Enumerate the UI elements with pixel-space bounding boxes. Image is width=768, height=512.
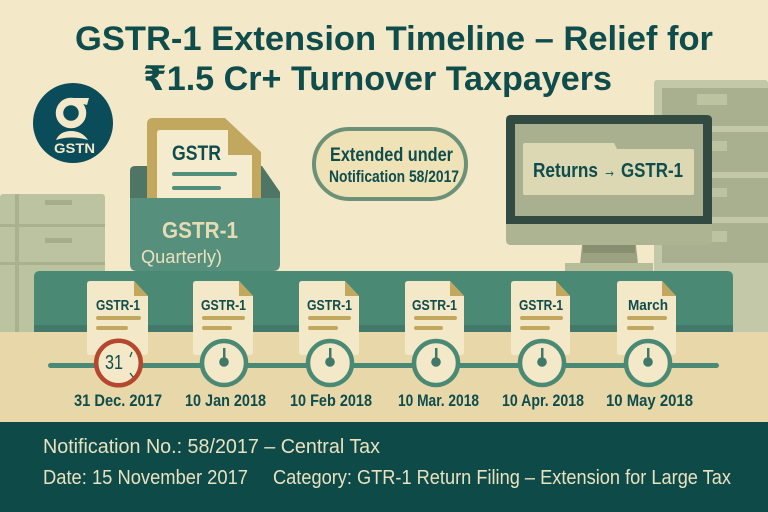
milestone: 10 Apr. 2018: GSTR-1 — [519, 297, 563, 314]
category: Category: GTR-1 Return Filing – Extension for Large Tax — [273, 467, 731, 489]
icon: GSTN logo — [33, 83, 113, 163]
milestone: 10 Jan 2018 — [185, 281, 266, 410]
title: GSTR-1 Extension Timeline – Relief for — [75, 20, 713, 58]
icon: GSTR folder with document: GSTR — [172, 142, 221, 165]
milestone: 10 Mar. 2018 — [398, 281, 479, 410]
milestone: 10 Apr. 2018: 10 Apr. 2018 — [502, 391, 584, 410]
timeline line — [48, 363, 719, 368]
milestone: 10 May 2018: March — [628, 297, 668, 314]
screen folder: Returns to GSTR-1 — [523, 143, 694, 195]
icon: GSTR folder with document: Quarterly) — [141, 247, 222, 267]
milestone: 10 Feb 2018 — [290, 281, 372, 410]
milestone: 10 Mar. 2018: GSTR-1 — [412, 297, 457, 314]
title: ₹1.5 Cr+ Turnover Taxpayers — [143, 60, 612, 98]
footer panel — [0, 422, 768, 512]
icon: GSTR folder with document — [130, 118, 280, 271]
icon: GSTR folder with document: GSTR-1 — [162, 217, 238, 243]
milestone: 31 Dec. 2017 — [74, 281, 162, 410]
icon: left filing cabinet — [0, 194, 105, 334]
title — [75, 20, 713, 98]
milestone: 10 Jan 2018: GSTR-1 — [201, 297, 246, 314]
icon: GSTN logo: GSTN — [54, 140, 95, 156]
callout: extended under notification — [314, 129, 466, 199]
milestone: 31 Dec. 2017: 31 — [105, 352, 123, 374]
milestone: 10 May 2018 — [606, 281, 693, 410]
milestone: 10 May 2018: 10 May 2018 — [606, 391, 693, 410]
milestone: 10 Feb 2018: GSTR-1 — [307, 297, 352, 314]
milestone: 10 Feb 2018: 10 Feb 2018 — [290, 391, 372, 410]
timeline band — [34, 271, 733, 332]
screen folder: Returns to GSTR-1: Returns — [533, 160, 598, 182]
icon: computer monitor — [506, 115, 712, 272]
milestone: 31 Dec. 2017: 31 Dec. 2017 — [74, 391, 162, 410]
callout: extended under notification: Extended under — [330, 145, 454, 166]
milestone: 31 Dec. 2017: GSTR-1 — [96, 297, 140, 314]
notification number: Notification No.: 58/2017 – Central Tax — [43, 436, 380, 458]
milestone: 10 Mar. 2018: 10 Mar. 2018 — [398, 391, 479, 410]
screen folder: Returns to GSTR-1: → — [603, 160, 616, 182]
floor — [0, 332, 768, 423]
date: Date: 15 November 2017 — [43, 467, 248, 489]
icon: right filing cabinet — [654, 80, 768, 334]
milestone: 10 Apr. 2018 — [502, 281, 584, 410]
callout: extended under notification: Notification 58/2017 — [329, 167, 459, 186]
screen folder: Returns to GSTR-1: GSTR-1 — [621, 160, 683, 182]
milestone: 10 Jan 2018: 10 Jan 2018 — [185, 391, 266, 410]
